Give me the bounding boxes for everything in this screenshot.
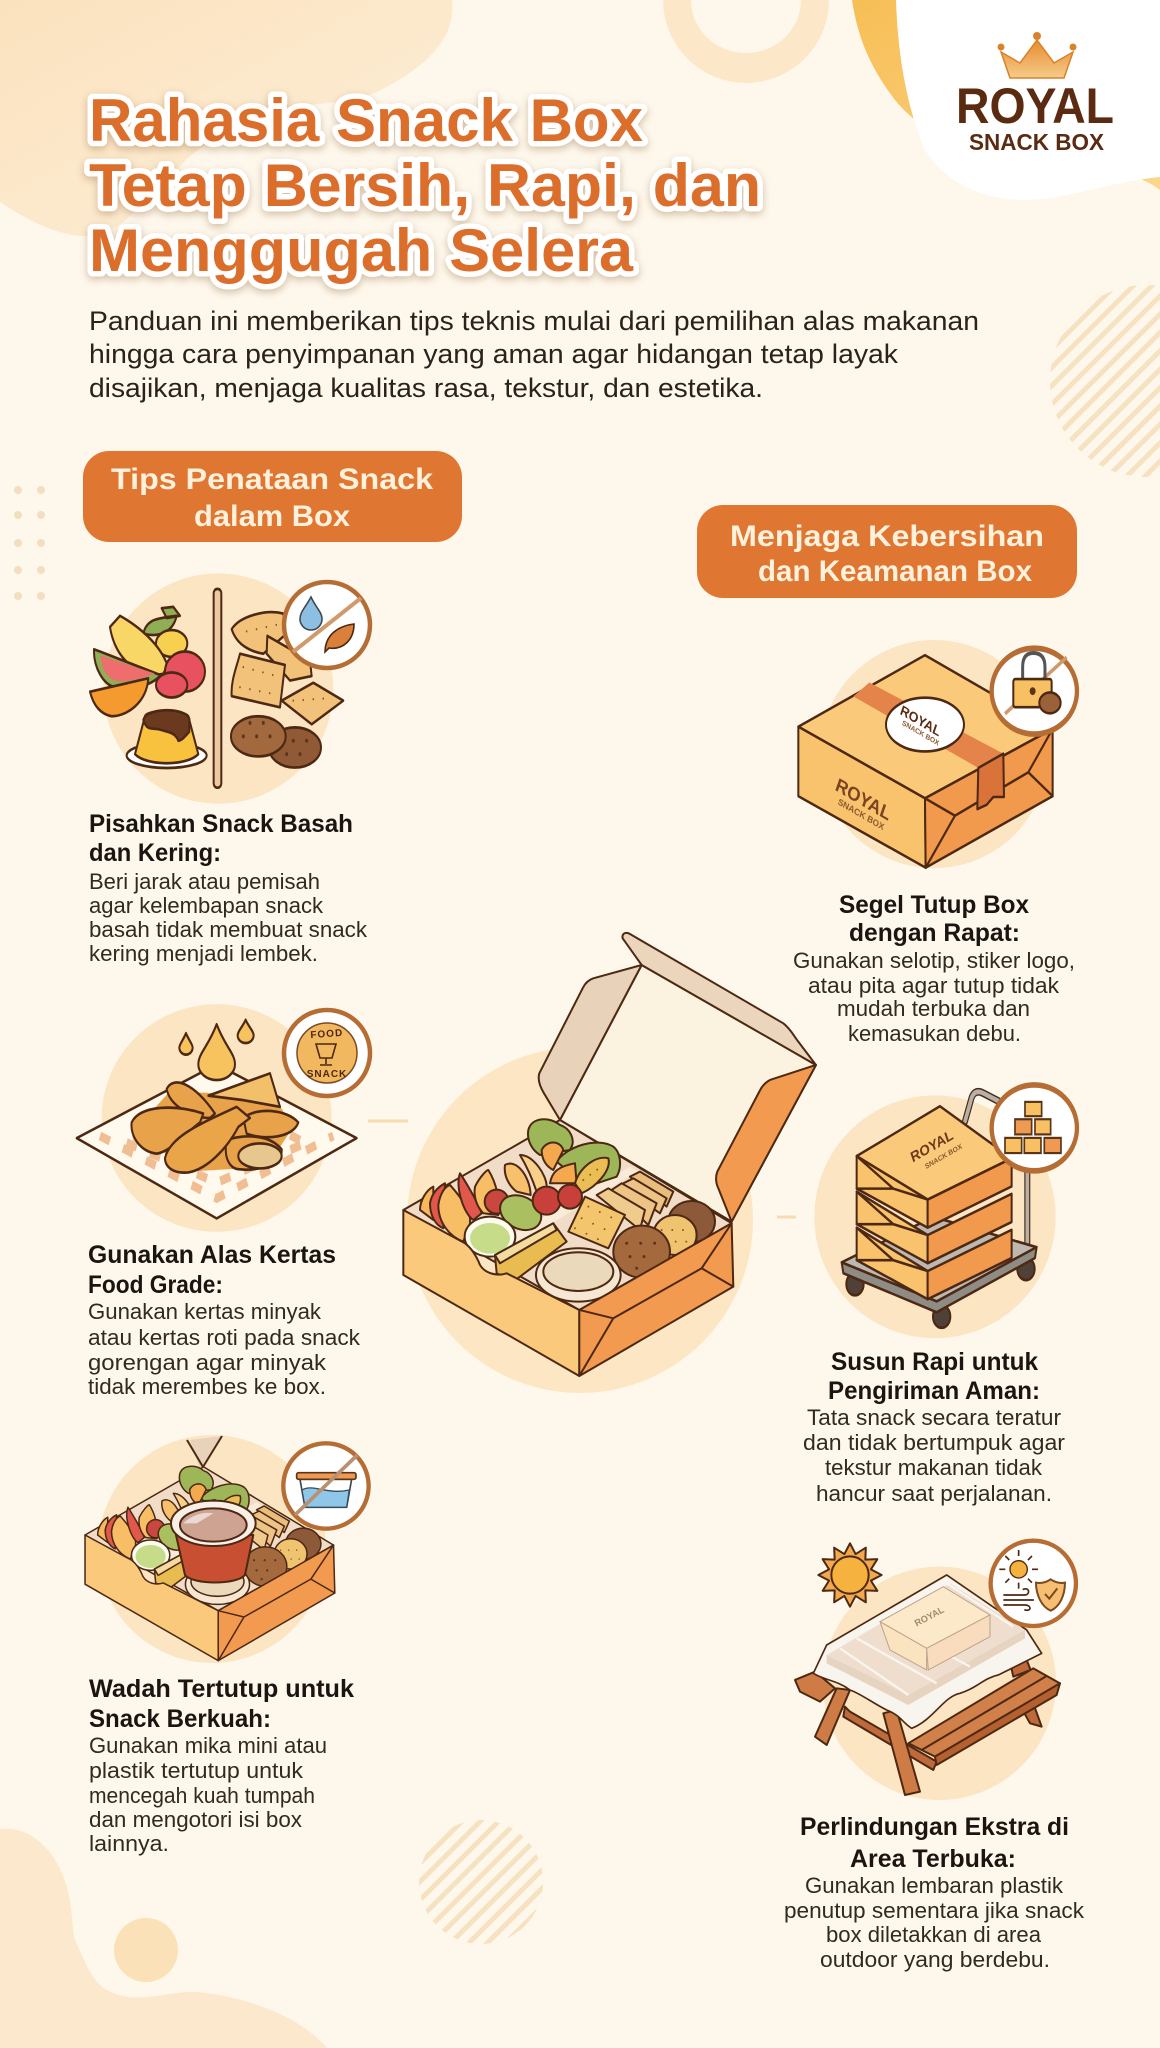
badge: food grade stamp xyxy=(284,1010,370,1096)
decorative circle bottom-left xyxy=(114,1918,178,1982)
text: wadah tertutup: mencegah kuah tumpah xyxy=(89,1783,315,1808)
illustration: fried snacks on paper xyxy=(77,1004,357,1232)
text: perlindungan ekstra: Gunakan lembaran plastik xyxy=(805,1873,1064,1898)
text: susun rapi: Susun Rapi untuk xyxy=(831,1348,1038,1376)
illustration: sealed box: ROYAL xyxy=(898,702,943,739)
top decorative ring xyxy=(663,0,829,83)
section heading: menjaga kebersihan xyxy=(697,505,1077,598)
badge: weather protection xyxy=(991,1541,1076,1626)
panel: wadah tertutup xyxy=(85,1435,369,1856)
panel: central open box illustration xyxy=(403,933,816,1393)
illustration: box with sealed cup xyxy=(85,1435,335,1663)
text: pisahkan snack: Pisahkan Snack Basah xyxy=(89,810,353,838)
connector left xyxy=(368,1120,408,1122)
illustration: stacked boxes on trolley: SNACK BOX xyxy=(924,1143,963,1171)
text: perlindungan ekstra: box diletakkan di area xyxy=(826,1922,1042,1947)
text: pisahkan snack: Beri jarak atau pemisah xyxy=(89,869,320,894)
logo wordmark: ROYAL xyxy=(956,78,1114,134)
text: wadah tertutup: Snack Berkuah: xyxy=(89,1705,271,1733)
text: alas kertas: atau kertas roti pada snack xyxy=(88,1325,361,1350)
text: segel tutup: Gunakan selotip, stiker logo, xyxy=(793,948,1075,973)
title: Tetap Bersih, Rapi, dan xyxy=(89,152,761,219)
text: wadah tertutup: lainnya. xyxy=(89,1831,169,1856)
badge: food grade stamp: SNACK xyxy=(307,1069,347,1080)
text: alas kertas: Food Grade: xyxy=(88,1271,223,1299)
text: pisahkan snack xyxy=(89,810,368,966)
text: alas kertas: Gunakan kertas minyak xyxy=(88,1299,322,1324)
text: susun rapi: dan tidak bertumpuk agar xyxy=(803,1430,1065,1455)
text: perlindungan ekstra xyxy=(784,1813,1085,1972)
text: susun rapi: tekstur makanan tidak xyxy=(825,1455,1043,1480)
illustration: sealed box: SNACK BOX xyxy=(901,720,940,748)
illustration: sealed box: SNACK BOX xyxy=(837,796,886,832)
panel: pisahkan snack basah dan kering xyxy=(89,573,370,966)
section heading: menjaga kebersihan: Menjaga Kebersihan xyxy=(730,520,1044,553)
intro paragraph: hingga cara penyimpanan yang aman agar hidangan tetap layak xyxy=(89,339,899,369)
section heading: tips penataan: Tips Penataan Snack xyxy=(111,463,433,496)
icon: crown xyxy=(998,32,1076,78)
badge: sealed container xyxy=(283,1443,369,1529)
intro paragraph: disajikan, menjaga kualitas rasa, tekstur, dan estetika. xyxy=(89,373,763,403)
text: alas kertas: gorengan agar minyak xyxy=(88,1350,327,1375)
badge: lock xyxy=(992,648,1077,734)
badge: no moisture xyxy=(284,582,370,668)
icon: sun xyxy=(818,1543,882,1607)
text: perlindungan ekstra: Perlindungan Ekstra di xyxy=(800,1813,1069,1841)
text: wadah tertutup xyxy=(89,1675,354,1856)
title xyxy=(89,87,761,284)
open snack box xyxy=(403,933,816,1376)
text: alas kertas xyxy=(88,1241,361,1399)
text: segel tutup: kemasukan debu. xyxy=(848,1021,1021,1046)
panel: segel tutup box xyxy=(793,640,1077,1046)
text: pisahkan snack: basah tidak membuat snack xyxy=(89,917,368,942)
section heading: tips penataan: dalam Box xyxy=(194,500,350,533)
section heading: menjaga kebersihan: dan Keamanan Box xyxy=(758,555,1032,588)
text: perlindungan ekstra: outdoor yang berdebu. xyxy=(820,1947,1050,1972)
text: alas kertas: Gunakan Alas Kertas xyxy=(88,1241,336,1269)
connector right xyxy=(777,1216,796,1218)
badge: stacked boxes xyxy=(992,1085,1077,1171)
text: segel tutup: atau pita agar tutup tidak xyxy=(808,973,1060,998)
text: pisahkan snack: kering menjadi lembek. xyxy=(89,941,318,966)
badge: food grade stamp: FOOD xyxy=(310,1028,344,1041)
panel: alas kertas food grade xyxy=(77,1004,370,1399)
illustration: sealed box xyxy=(798,640,1053,868)
illustration: picnic table with plastic cover xyxy=(795,1567,1060,1800)
text: susun rapi xyxy=(803,1348,1065,1506)
text: wadah tertutup: plastik tertutup untuk xyxy=(89,1758,304,1783)
decorative striped circle bottom xyxy=(419,1820,543,1944)
text: pisahkan snack: dan Kering: xyxy=(89,839,221,867)
text: perlindungan ekstra: Area Terbuka: xyxy=(850,1845,1016,1873)
text: segel tutup: mudah terbuka dan xyxy=(837,996,1030,1021)
illustration: wet and dry snacks xyxy=(90,573,343,804)
text: pisahkan snack: agar kelembapan snack xyxy=(89,893,324,918)
intro paragraph xyxy=(89,306,979,403)
bottom-left decorative blob xyxy=(0,1829,327,2048)
text: susun rapi: hancur saat perjalanan. xyxy=(816,1481,1052,1506)
text: wadah tertutup: Wadah Tertutup untuk xyxy=(89,1675,354,1703)
decorative dots xyxy=(14,486,45,600)
decorative striped circle top right xyxy=(1050,285,1160,477)
text: segel tutup: dengan Rapat: xyxy=(849,919,1020,947)
text: wadah tertutup: Gunakan mika mini atau xyxy=(89,1733,327,1758)
text: segel tutup xyxy=(793,891,1075,1046)
logo sub-wordmark: SNACK BOX xyxy=(969,129,1105,155)
illustration: stacked boxes on trolley: ROYAL xyxy=(908,1126,955,1165)
panel: perlindungan ekstra xyxy=(784,1541,1085,1972)
logo corner xyxy=(852,0,1160,200)
intro paragraph: Panduan ini memberikan tips teknis mulai dari pemilihan alas makanan xyxy=(89,306,979,336)
text: perlindungan ekstra: penutup sementara jika snack xyxy=(784,1898,1085,1923)
text: alas kertas: tidak merembes ke box. xyxy=(88,1374,326,1399)
illustration: picnic table with plastic cover: ROYAL xyxy=(913,1605,946,1628)
illustration: stacked boxes on trolley xyxy=(814,1092,1056,1338)
illustration: sealed box: ROYAL xyxy=(833,773,894,825)
title: Menggugah Selera xyxy=(89,217,634,284)
text: wadah tertutup: dan mengotori isi box xyxy=(89,1807,302,1832)
panel: susun rapi xyxy=(803,1085,1077,1506)
top-left decorative blob xyxy=(0,0,452,236)
section heading: tips penataan xyxy=(83,451,462,542)
text: segel tutup: Segel Tutup Box xyxy=(839,891,1029,919)
title: Rahasia Snack Box xyxy=(89,87,643,154)
text: susun rapi: Pengiriman Aman: xyxy=(828,1377,1040,1405)
text: susun rapi: Tata snack secara teratur xyxy=(807,1405,1061,1430)
